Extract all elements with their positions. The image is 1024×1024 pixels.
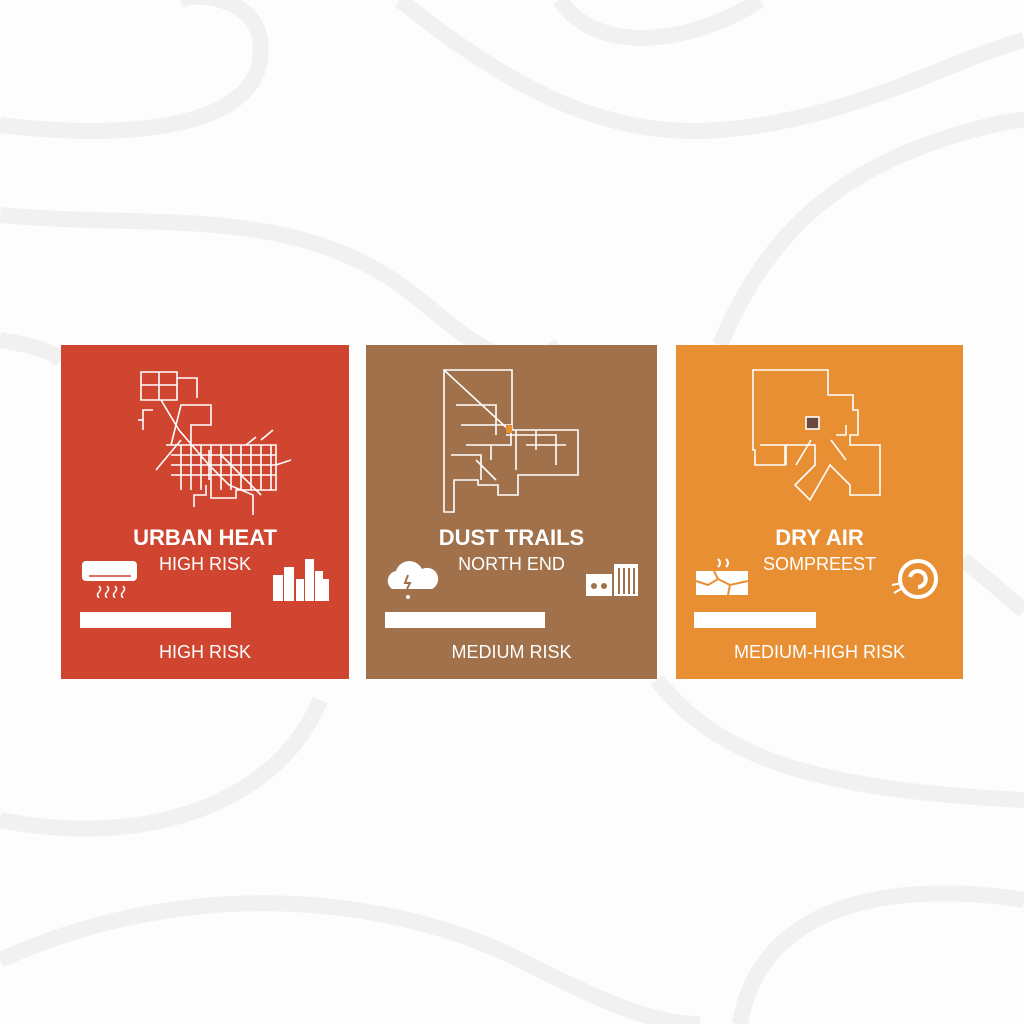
panel: dry air: [676, 345, 963, 679]
map: urban heat: [138, 371, 292, 515]
map: dry air: [752, 369, 881, 502]
risk bar: [694, 612, 816, 628]
icon: containers: [586, 564, 638, 596]
subtitle: SOMPREEST: [763, 554, 876, 574]
subtitle: HIGH RISK: [159, 554, 251, 574]
title: URBAN HEAT: [133, 525, 277, 550]
map: dust trails: [443, 369, 579, 513]
icon: city buildings: [273, 559, 329, 601]
risk label: HIGH RISK: [159, 642, 251, 662]
panel: dust trails: [366, 345, 657, 679]
risk label: MEDIUM RISK: [451, 642, 572, 662]
icon: dry swirl: [892, 559, 938, 599]
risk bar: [385, 612, 545, 628]
icon: air conditioner: [82, 561, 137, 598]
icon: dust cloud: [388, 561, 438, 599]
title: DRY AIR: [775, 525, 864, 550]
risk bar: [80, 612, 231, 628]
panel: urban heat: [61, 345, 349, 679]
risk label: MEDIUM-HIGH RISK: [734, 642, 905, 662]
icon: cracked ground: [696, 558, 748, 595]
subtitle: NORTH END: [458, 554, 565, 574]
title: DUST TRAILS: [439, 525, 584, 550]
